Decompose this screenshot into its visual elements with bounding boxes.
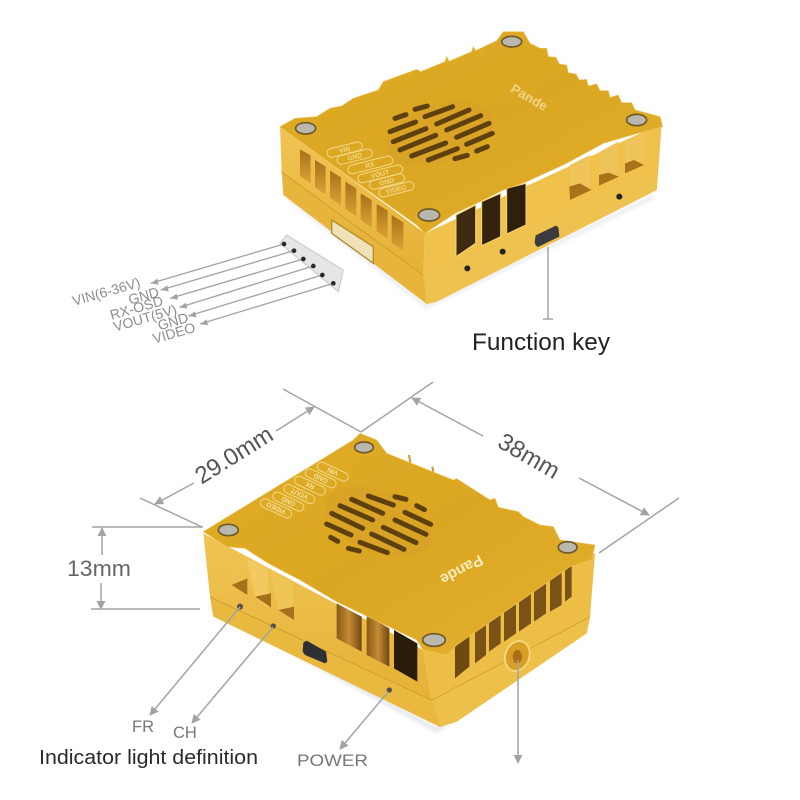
pin labels on plate: GND xyxy=(313,471,329,484)
caption: Indicator light definition xyxy=(39,747,258,769)
pin labels on plate: GND xyxy=(280,495,297,507)
upper right face with fins xyxy=(423,553,595,700)
fan grille xyxy=(315,472,442,571)
lower housing xyxy=(210,597,590,727)
dimension: height 13mm xyxy=(67,527,203,609)
brand: Pande: Pande xyxy=(508,81,550,114)
upper left face with windows xyxy=(203,533,432,700)
function button xyxy=(535,226,559,247)
dimension: width 29.0mm xyxy=(140,382,433,527)
pin names: GND xyxy=(156,309,190,333)
dimension: length 38mm: 38mm xyxy=(493,428,564,485)
arrow heads xyxy=(151,279,208,325)
pin names xyxy=(70,274,197,347)
screws xyxy=(218,442,577,646)
SMA connector xyxy=(501,637,534,675)
pin names: VIN(6-36V) xyxy=(70,274,142,309)
header pins xyxy=(409,455,434,476)
pin names: GND xyxy=(126,284,161,308)
indicator holes xyxy=(464,194,622,271)
function key leader xyxy=(543,247,553,319)
screws xyxy=(296,36,647,221)
pin labels on plate: VIDEO xyxy=(385,184,407,196)
pin labels on plate: VIN xyxy=(339,146,351,155)
fan grille xyxy=(378,90,502,177)
device: top view xyxy=(280,32,663,307)
pin arrows xyxy=(151,244,333,324)
pin names: VOUT(5V) xyxy=(111,301,179,335)
brand: Pande: Pande xyxy=(437,551,486,588)
label POWER: POWER xyxy=(297,751,368,770)
pin labels on plate: VOUT xyxy=(290,486,310,500)
pin names: RX-OSD xyxy=(108,293,165,323)
dimension: length 38mm xyxy=(412,398,679,553)
upper right face with slots xyxy=(423,123,662,275)
indicator holes xyxy=(237,604,392,693)
pin labels on plate: VIDEO xyxy=(265,500,287,515)
device: bottom view xyxy=(203,433,595,730)
connector with pin arrows xyxy=(70,235,343,347)
connector bar xyxy=(280,235,343,292)
pin names: VIDEO xyxy=(151,319,197,347)
top plate xyxy=(280,32,663,233)
dimension: height 13mm: 13mm xyxy=(67,556,131,581)
function key label: Function key xyxy=(472,329,610,356)
label CH: CH xyxy=(173,724,197,742)
label FR: FR xyxy=(132,718,154,736)
USB port xyxy=(332,220,373,263)
indicator leader lines xyxy=(150,607,518,763)
pin holes xyxy=(282,242,336,286)
lower housing xyxy=(282,170,658,304)
pin labels on plate: GND xyxy=(347,152,363,163)
dimension: width 29.0mm: 29.0mm xyxy=(190,421,278,490)
pin labels on plate: RX xyxy=(304,480,316,490)
pin labels on plate xyxy=(259,461,350,519)
pin labels on plate: VOUT xyxy=(370,169,390,180)
top plate xyxy=(203,433,595,655)
pin labels on plate: GND xyxy=(379,177,395,188)
pin labels on plate: VIN xyxy=(326,465,340,476)
pin labels on plate: RX xyxy=(365,161,376,170)
pin labels on plate xyxy=(326,141,415,198)
upper left face with slots xyxy=(280,127,425,275)
function button xyxy=(303,641,327,663)
